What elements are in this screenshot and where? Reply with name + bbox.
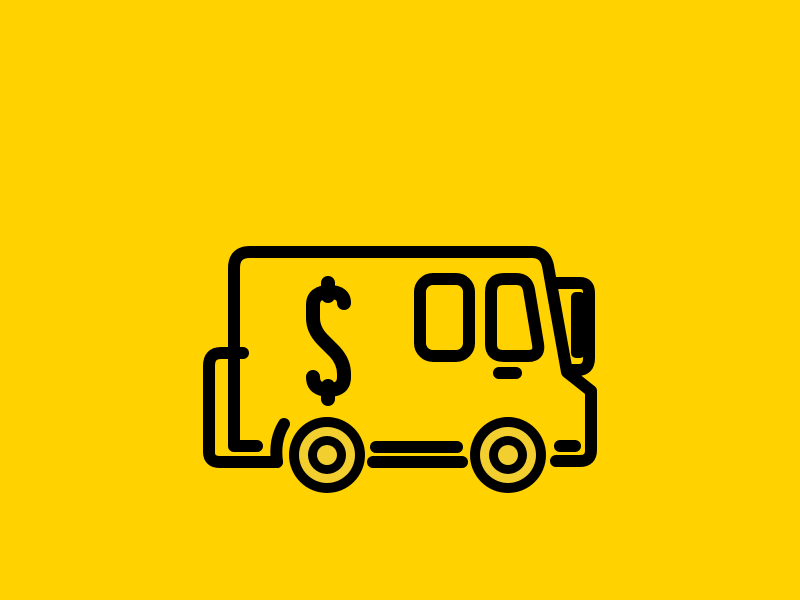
wheel: left — [289, 417, 365, 493]
dollar sign — [313, 283, 344, 399]
middle bars — [373, 446, 575, 462]
window 1 — [420, 279, 469, 356]
mirror — [556, 283, 589, 370]
wheel: right — [470, 417, 546, 493]
window 2 — [491, 279, 538, 356]
truck — [209, 252, 591, 462]
body outline — [209, 252, 591, 462]
window handle — [499, 367, 516, 379]
